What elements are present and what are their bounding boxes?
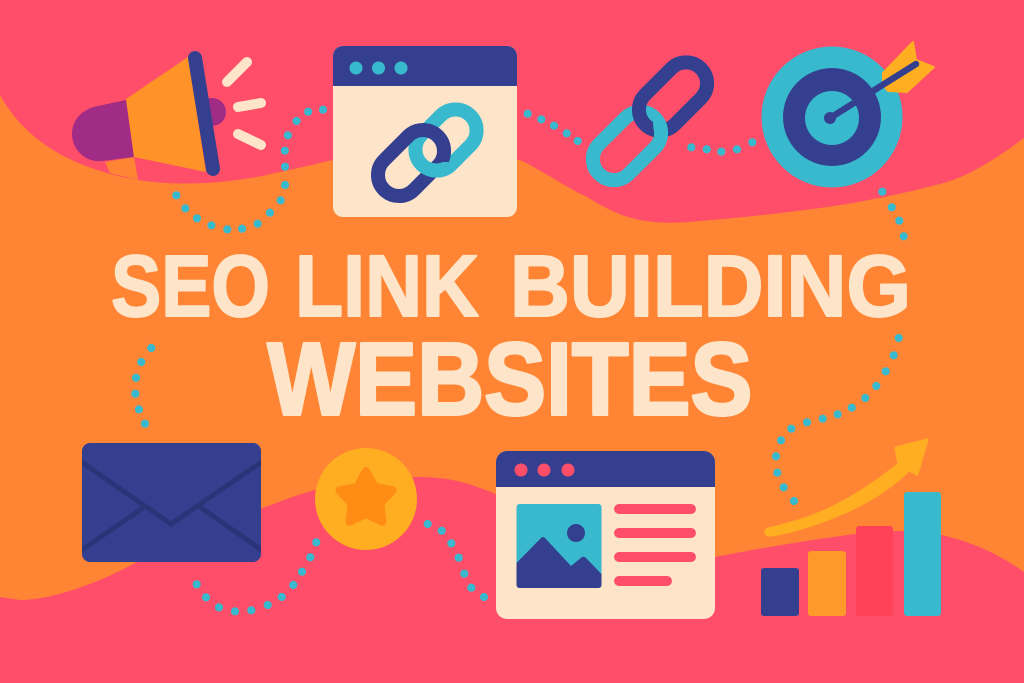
image placeholder (516, 504, 602, 588)
icon: browser window with chain link (333, 46, 517, 217)
dotted connectors (131, 106, 908, 615)
title line 2: WEBSITES (268, 322, 752, 436)
title line 1: LINK (295, 238, 479, 335)
icon: target with arrow (762, 42, 934, 188)
bar chart (761, 492, 941, 616)
icon: chain link (584, 54, 716, 189)
icon: megaphone (72, 57, 261, 180)
title line 1: BUILDING (510, 238, 911, 335)
title line 1: SEO (111, 238, 270, 335)
text lines (614, 504, 696, 586)
icon: star badge (315, 448, 417, 550)
growth arrow (766, 440, 927, 535)
icon: envelope (80, 443, 263, 562)
title line 1 (111, 238, 911, 335)
icon: web page layout (496, 451, 715, 619)
title (111, 238, 911, 436)
background: orange wave (0, 95, 1024, 600)
